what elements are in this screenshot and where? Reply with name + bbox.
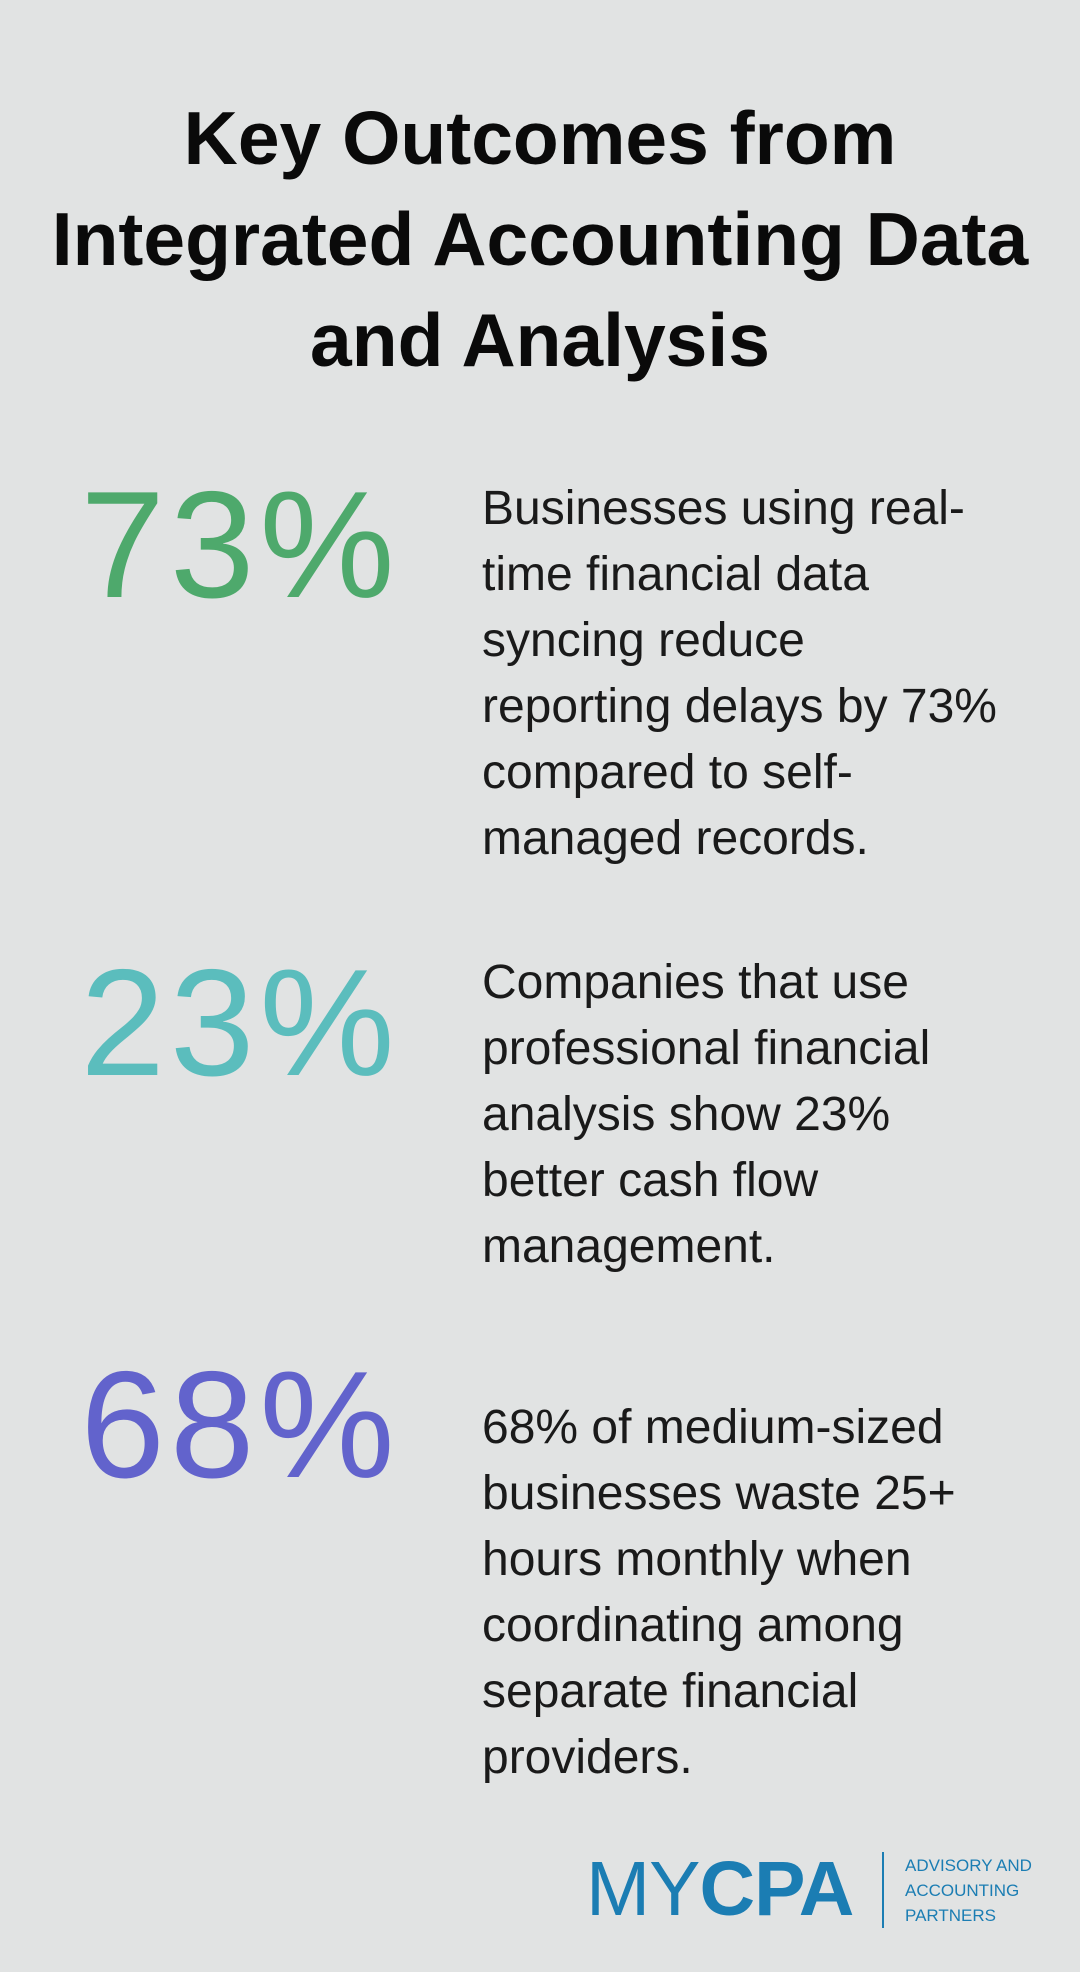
text: 23% description: better cash flow [482, 1154, 818, 1207]
text: 23% description: management. [482, 1220, 776, 1273]
logo tagline: ADVISORY AND [905, 1856, 1032, 1875]
text: 23% description [482, 956, 930, 1273]
text: 68% description: coordinating among [482, 1599, 904, 1652]
stat: 73%: 73% [80, 460, 400, 630]
text: 68% description: separate financial [482, 1665, 858, 1718]
text: 73% description: managed records. [482, 812, 869, 865]
text: 73% description [482, 482, 997, 865]
title [52, 96, 1029, 382]
text: 73% description: Businesses using real- [482, 482, 965, 535]
text: 73% description: time financial data [482, 548, 869, 601]
text: 68% description [482, 1401, 956, 1784]
logo tagline: PARTNERS [905, 1906, 996, 1925]
stat: 68%: 68% [80, 1340, 400, 1510]
text: 23% description: Companies that use [482, 956, 909, 1009]
logo tagline: ACCOUNTING [905, 1881, 1019, 1900]
logo tagline [905, 1856, 1032, 1925]
text: 73% description: reporting delays by 73% [482, 680, 997, 733]
text: 23% description: analysis show 23% [482, 1088, 890, 1141]
title: Integrated Accounting Data [52, 197, 1028, 281]
text: 68% description: 68% of medium-sized [482, 1401, 944, 1454]
text: 68% description: businesses waste 25+ [482, 1467, 956, 1520]
stat: 23%: 23% [80, 938, 400, 1108]
logo wordmark: MYCPA [586, 1846, 853, 1932]
text: 73% description: syncing reduce [482, 614, 805, 667]
title: Key Outcomes from [184, 96, 896, 180]
title: and Analysis [310, 298, 770, 382]
logo [586, 1846, 1032, 1932]
text: 73% description: compared to self- [482, 746, 853, 799]
text: 68% description: hours monthly when [482, 1533, 912, 1586]
text: 23% description: professional financial [482, 1022, 930, 1075]
text: 68% description: providers. [482, 1731, 693, 1784]
